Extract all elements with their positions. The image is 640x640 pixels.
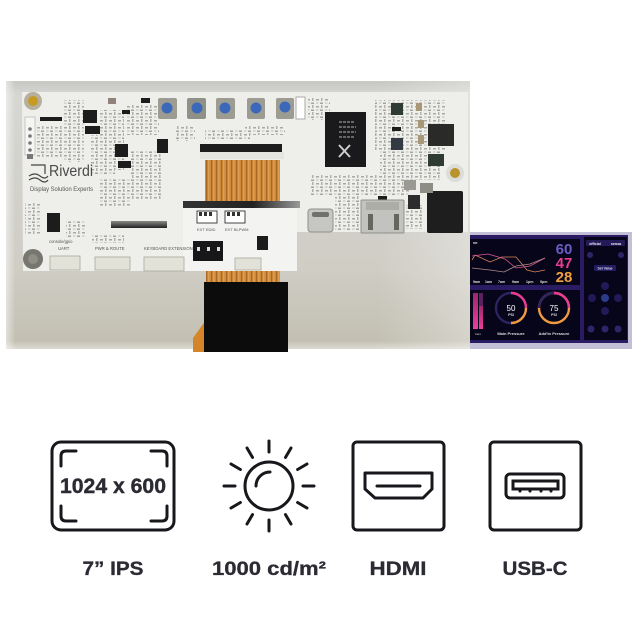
chart panel: 60	[556, 241, 572, 258]
label: HDMI: HDMI	[370, 559, 426, 580]
gauges panel: PSI	[508, 313, 514, 317]
connector labels: console/gpio	[49, 239, 73, 244]
gauges panel: Add'tn Pressure	[539, 331, 570, 336]
sub board with DIP switches: EXT EDID	[197, 227, 215, 232]
chart panel: 1am	[485, 280, 492, 284]
port: HDMI	[361, 200, 404, 233]
chart panel: 28	[556, 269, 572, 286]
panel: controller PCB	[22, 92, 468, 271]
logo: Riverdi: Riverdi	[49, 163, 93, 180]
port: USB-C	[308, 209, 333, 232]
icon: HDMI port	[353, 442, 444, 530]
chart panel: 7am	[498, 280, 505, 284]
icon: USB port	[490, 442, 581, 530]
control panel: sensa	[611, 242, 622, 246]
small chips and inductors	[40, 98, 454, 232]
label: 7 inch IPS: 7” IPS	[82, 559, 144, 580]
buttons	[158, 97, 305, 119]
control panel: official	[589, 242, 601, 246]
flex connector and ribbon	[183, 144, 300, 208]
connector labels: KEYBOARD EXTENSION	[144, 246, 193, 251]
label: brightness: 1000 cd/m²	[212, 559, 326, 580]
panel: display metal back	[6, 81, 470, 349]
control panel	[584, 237, 627, 340]
chart panel	[470, 239, 580, 286]
chart panel: ve	[473, 240, 478, 245]
connector labels: UART	[58, 246, 70, 251]
connector labels: PWR & ROUTE	[95, 246, 125, 251]
icon: resolution 1024 x 600: 1024 x 600	[60, 475, 166, 498]
mounting hole: top left	[24, 92, 42, 110]
gauges panel	[470, 290, 580, 340]
logo: Riverdi: Display Solution Experts	[30, 186, 93, 193]
sub board with DIP switches: EXT BLPWM	[225, 227, 248, 232]
component clusters	[25, 98, 445, 253]
mounting hole: right	[446, 164, 464, 182]
logo: Riverdi	[29, 163, 93, 193]
panel: display screen, side view	[470, 232, 632, 349]
gauges panel: bars	[475, 332, 481, 336]
mounting hole: bottom right	[275, 252, 291, 268]
chart panel: 1pm	[526, 280, 533, 284]
side connector	[25, 117, 35, 159]
label: USB-C: USB-C	[502, 559, 568, 580]
gauges panel: 50	[507, 304, 516, 313]
icon: resolution 1024 x 600	[52, 442, 174, 530]
connector labels	[49, 239, 193, 251]
panel: flex cable and driver	[193, 268, 288, 352]
chart panel: 9am	[473, 280, 480, 284]
control panel: Set Value	[597, 266, 613, 270]
chart panel: 5pm	[540, 280, 547, 284]
mounting hole: bottom left	[23, 249, 43, 269]
chart panel: 47	[556, 255, 572, 272]
gauges panel: 75	[550, 304, 559, 313]
gauges panel: Main Pressure	[497, 331, 525, 336]
bottom connectors	[50, 256, 261, 271]
main chip	[325, 112, 366, 167]
gauges panel: PSI	[551, 313, 557, 317]
sub board with DIP switches	[111, 208, 297, 271]
port: DC jack	[404, 180, 463, 233]
icon: brightness sun	[224, 441, 314, 531]
chart panel: 9am	[512, 280, 519, 284]
